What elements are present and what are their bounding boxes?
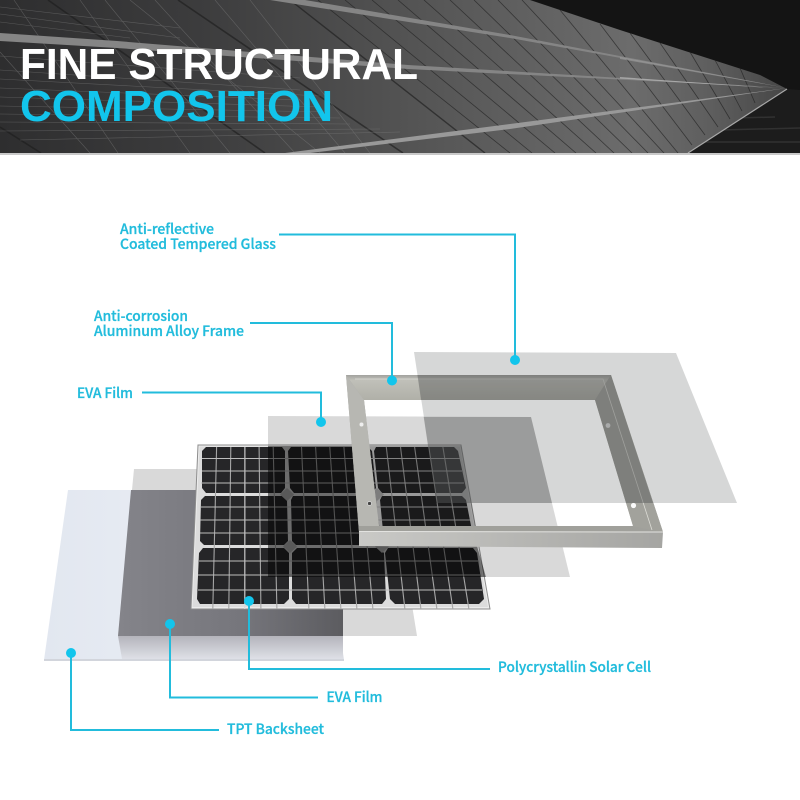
cell grid lines bbox=[198, 447, 482, 609]
connector and label: solar cell: Polycrystallin Solar Cell bbox=[498, 657, 651, 677]
title bbox=[20, 40, 418, 131]
connector and label: tempered glass bbox=[120, 219, 520, 365]
connector and label: aluminum frame: Aluminum Alloy Frame bbox=[94, 321, 244, 341]
connector and label: aluminum frame: Anti-corrosion bbox=[94, 306, 188, 326]
title: COMPOSITION bbox=[20, 82, 333, 131]
connector and label: tempered glass: Anti-reflective bbox=[120, 219, 214, 239]
header banner: solar field photo bbox=[0, 0, 800, 153]
connector and label: TPT backsheet: TPT Backsheet bbox=[227, 719, 324, 739]
header bottom edge bbox=[0, 153, 800, 155]
connector and label: solar cell bbox=[244, 596, 651, 677]
cell junction diamonds bbox=[280, 488, 389, 553]
layer: TPT backsheet bbox=[44, 490, 344, 661]
layer: solar cell panel bbox=[191, 445, 490, 609]
frame screw holes bbox=[360, 422, 636, 508]
frame front bar bbox=[359, 531, 663, 548]
layer: lower EVA film bbox=[118, 469, 417, 659]
connector and label: aluminum frame bbox=[94, 306, 397, 386]
connector and label: tempered glass: Coated Tempered Glass bbox=[120, 234, 276, 254]
connector and label: lower EVA film bbox=[165, 619, 382, 707]
solar cell blocks bbox=[197, 447, 484, 604]
connector and label: upper EVA film bbox=[77, 383, 326, 427]
connector and label: lower EVA film: EVA Film bbox=[326, 687, 382, 707]
layer: aluminum alloy frame bbox=[346, 375, 663, 548]
connector and label: TPT backsheet bbox=[66, 648, 324, 739]
layer: anti-reflective glass bbox=[414, 352, 737, 503]
title: FINE STRUCTURAL bbox=[20, 40, 418, 89]
layer: upper EVA film bbox=[268, 416, 570, 577]
connector and label: upper EVA film: EVA Film bbox=[77, 383, 133, 403]
